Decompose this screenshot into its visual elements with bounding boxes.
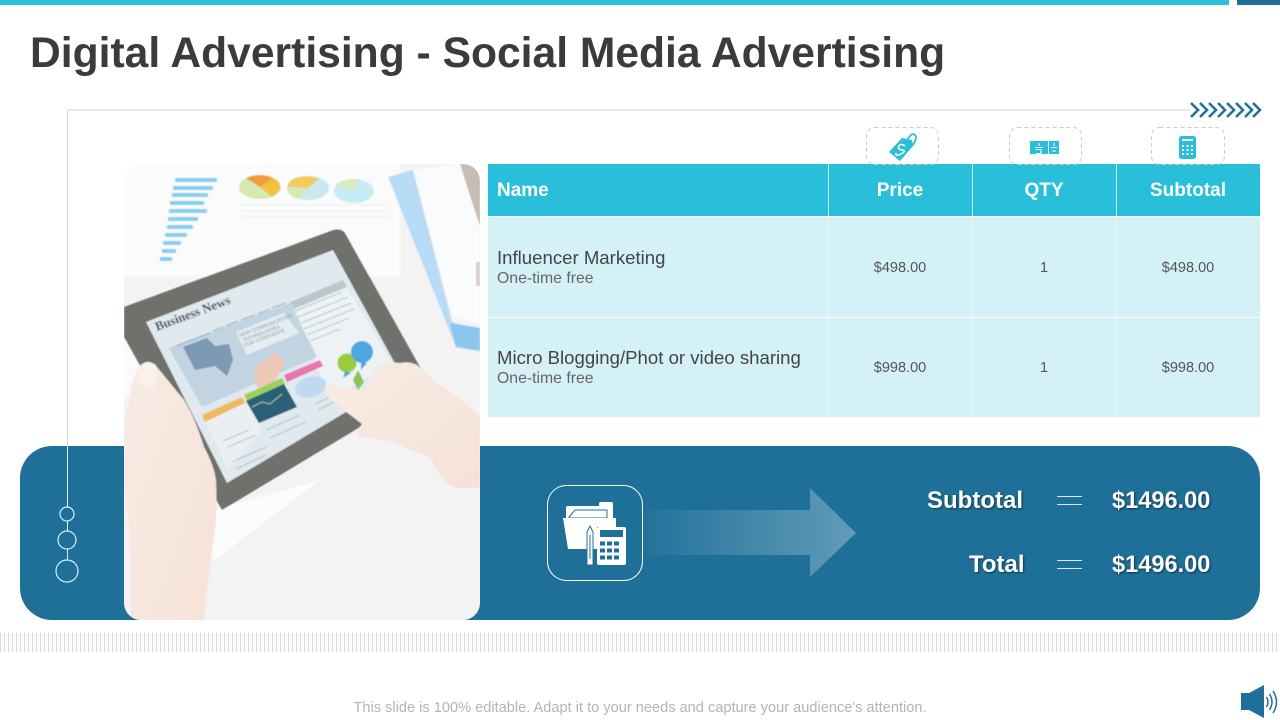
photo: tablet on desk: NEW COMMUNICATION xyxy=(239,313,293,339)
row 1 name: Influencer Marketing xyxy=(497,247,665,268)
header: Subtotal: Subtotal xyxy=(1150,180,1226,201)
icon: folder with calculator xyxy=(547,485,643,581)
equals sign xyxy=(1057,496,1082,505)
icon: speaker xyxy=(1241,685,1278,718)
calculator icon box xyxy=(1151,127,1225,165)
table row 2 background xyxy=(488,318,1260,417)
row 2 price: $998.00 xyxy=(874,360,926,376)
row 2 subtotal: $998.00 xyxy=(1162,360,1214,376)
table header background xyxy=(488,164,1260,216)
row 1 note: One-time free xyxy=(497,270,594,287)
subtotal label: Subtotal xyxy=(927,487,1023,514)
chevrons xyxy=(1190,102,1262,118)
header: Price: Price xyxy=(877,180,923,201)
header: Name: Name xyxy=(497,180,549,201)
top accent bar xyxy=(0,0,1229,5)
arrow xyxy=(658,488,856,577)
total label: Total xyxy=(969,551,1025,578)
subtotal value: $1496.00 xyxy=(1112,488,1210,514)
fraction icon box xyxy=(1009,127,1082,165)
row 1 subtotal: $498.00 xyxy=(1162,260,1214,276)
bottom summary band xyxy=(20,446,1260,620)
row 1 price: $498.00 xyxy=(874,260,926,276)
top accent bar short xyxy=(1237,0,1280,5)
row 2 note: One-time free xyxy=(497,370,594,387)
title: Digital Advertising - Social Media Advertising xyxy=(30,29,945,77)
stripe divider xyxy=(0,633,1280,652)
total value: $1496.00 xyxy=(1112,552,1210,578)
footer note: This slide is 100% editable. Adapt it to your needs and capture your audience's attention. xyxy=(353,700,927,716)
price tag icon box xyxy=(866,127,939,165)
photo: tablet on desk xyxy=(124,164,480,620)
photo: tablet on desk: Business News xyxy=(153,293,232,334)
row 2 qty: 1 xyxy=(1040,360,1048,376)
column dividers xyxy=(828,164,1117,417)
photo: tablet on desk: TECHNOLOGIES xyxy=(242,324,281,344)
table row 1 background xyxy=(488,217,1260,317)
header: QTY: QTY xyxy=(1024,180,1064,201)
row 2 name: Micro Blogging/Phot or video sharing xyxy=(497,347,801,368)
photo: tablet on desk: FOR CORPORATE xyxy=(244,328,287,349)
connector line and circles xyxy=(55,110,1190,583)
row 1 qty: 1 xyxy=(1040,260,1048,276)
equals sign xyxy=(1057,560,1082,569)
